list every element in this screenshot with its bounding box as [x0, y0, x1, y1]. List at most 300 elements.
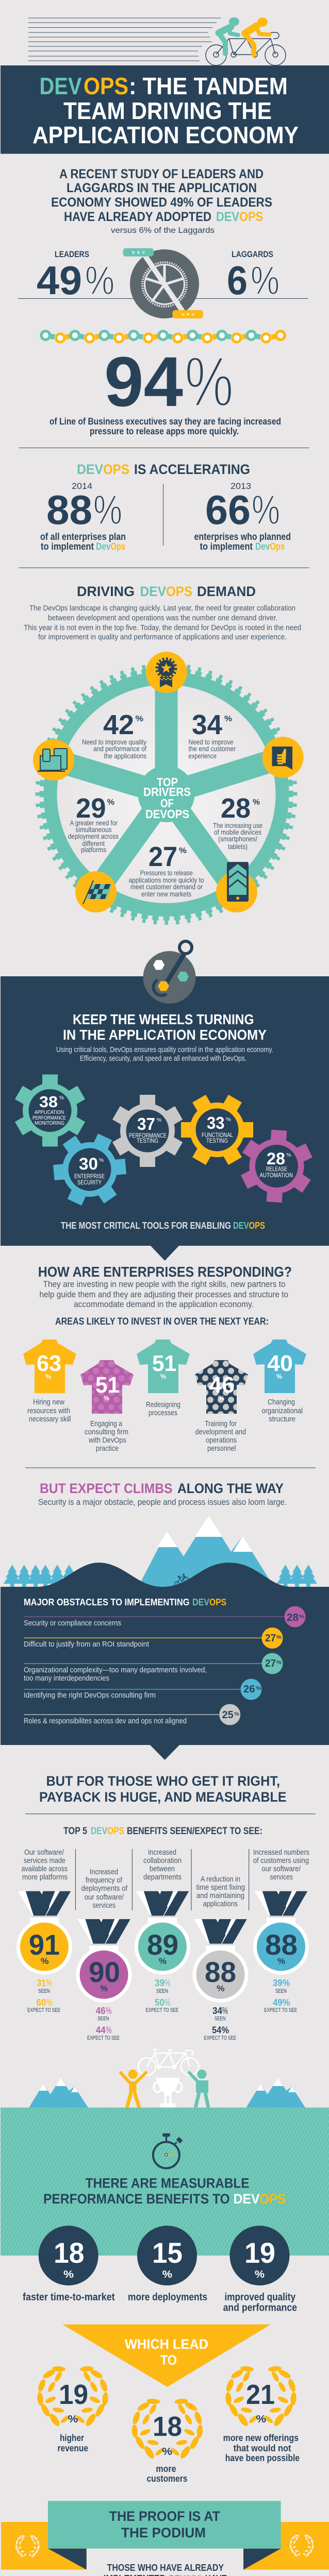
- medal: more platforms 91%: services made: [24, 1856, 65, 1865]
- driver 29%: simultaneous: [75, 825, 111, 834]
- driver 27%: meet customer demand or: [130, 883, 203, 891]
- jersey: hiring 63%: resources with: [27, 1406, 70, 1415]
- medal: deployment frequency 90%: Increased: [90, 1868, 118, 1876]
- gear: enterprise security 30%: %: [99, 1158, 104, 1163]
- driver 28%: 28: [221, 793, 251, 824]
- driver 29%: platforms: [81, 845, 106, 854]
- stat: 2014 88%: 2014: [72, 481, 92, 491]
- medal: collaboration 89%: Increased: [148, 1848, 176, 1857]
- medal: more platforms 91%: available across: [22, 1865, 68, 1873]
- obstacle: roles 25%: Roles & responsibilites across dev and ops not aligned: [24, 1717, 187, 1725]
- heading: DevOps is accelerating: IS ACCELERATING: [134, 462, 250, 477]
- gear: performance testing 37%: [116, 1095, 179, 1167]
- gear: performance testing 37%: TESTING: [137, 1138, 158, 1144]
- stat: 19% improved quality: %: [255, 2269, 265, 2280]
- stat: 2013 66%: to implement: [200, 541, 253, 552]
- obstacle: complexity 27%: %: [276, 1660, 282, 1666]
- gear: functional testing 33%: TESTING: [206, 1138, 228, 1144]
- obstacle: complexity 27%: [24, 1653, 283, 1683]
- jersey: hiring 63%: [23, 1340, 76, 1423]
- jersey: organizational structure 40%: %: [276, 1372, 282, 1380]
- chart caption: THE MOST CRITICAL TOOLS FOR ENABLING: [61, 1221, 231, 1231]
- stat: 19% improved quality: and performance: [223, 2302, 297, 2314]
- subheading: top 5 benefits: DEV: [91, 1826, 107, 1837]
- stat: 15% more deployments: [128, 2226, 207, 2303]
- medal: collaboration 89%: EXPECT TO SEE: [145, 2007, 178, 2013]
- medal: more customers 88%: EXPECT TO SEE: [264, 2007, 297, 2013]
- heading: PERFORMANCE BENEFITS TO: [43, 2191, 230, 2207]
- obstacle: complexity 27%: too many interdependencies: [24, 1674, 109, 1683]
- stat: laggards 6%: %: [251, 258, 279, 303]
- gear: release automation 28%: AUTOMATION: [260, 1173, 293, 1179]
- driver 28%: tablets): [228, 842, 248, 851]
- wreath: 21% more new offerings: %: [256, 2414, 266, 2425]
- gear: application performance monitoring 38%: [19, 1075, 81, 1147]
- stat: 18% faster time-to-market: %: [63, 2269, 74, 2280]
- stat: 19% improved quality: 19: [244, 2236, 275, 2269]
- stat: 94%: 94: [104, 343, 183, 421]
- stat: 2013 66%: %: [252, 487, 280, 533]
- heading: but expect climbs: ALONG THE WAY: [177, 1481, 284, 1496]
- medal: reduced maintenance 88%: 34: [212, 2006, 222, 2016]
- medal: deployment frequency 90%: deployments of: [81, 1884, 128, 1893]
- stat: 15% more deployments: 15: [152, 2236, 183, 2269]
- title banner: TEAM DRIVING THE: [63, 97, 272, 124]
- medal: reduced maintenance 88%: and maintaining: [196, 1891, 244, 1900]
- title banner: APPLICATION ECONOMY: [32, 122, 299, 148]
- gear: performance testing 37%: PERFORMANCE: [129, 1133, 167, 1139]
- stat: 94%: %: [185, 343, 234, 421]
- medal: deployment frequency 90%: SEEN: [97, 2016, 109, 2022]
- jersey: redesigning processes 51%: %: [160, 1372, 166, 1380]
- intro statement: ECONOMY SHOWED 49% OF LEADERS: [51, 195, 272, 210]
- driver 42%: and performance of: [93, 744, 146, 753]
- driver 34%: [189, 709, 236, 760]
- medal: reduced maintenance 88%: %: [222, 2006, 228, 2016]
- teal person: [189, 2070, 208, 2108]
- driver 27%: %: [179, 846, 187, 855]
- medal: collaboration 89%: 50: [155, 1997, 164, 2008]
- medal: more customers 88%: 88: [265, 1928, 298, 1961]
- wreath: 18% more customers: more: [156, 2464, 176, 2474]
- heading: OPS: [209, 1597, 226, 1607]
- stat: 2014 88%: [40, 481, 126, 552]
- subheading: top 5 benefits: BENEFITS SEEN/EXPECT TO SEE:: [127, 1826, 262, 1837]
- stat: 94%: of Line of Business executives say they are facing increased: [50, 416, 281, 427]
- text block: enterprises response: [39, 1279, 288, 1309]
- gear: release automation 28%: %: [287, 1153, 291, 1158]
- gear: application performance monitoring 38%: APPLICATION: [35, 1109, 64, 1115]
- obstacle: roles 25%: %: [234, 1711, 239, 1717]
- jersey: consulting firm 51%: 51: [95, 1372, 120, 1398]
- medal: reduced maintenance 88%: time spent fixing: [196, 1883, 245, 1892]
- icon: chainring with DEV and OPS crank: [123, 248, 203, 318]
- obstacle: consulting firm 26%: Identifying the right DevOps consulting firm: [24, 1691, 156, 1700]
- jersey: redesigning processes 51%: Redesigning: [146, 1400, 180, 1409]
- medal: collaboration 89%: collaboration: [143, 1856, 182, 1865]
- title banner: [1, 65, 329, 154]
- driver 42%: the applications: [104, 752, 146, 760]
- medal: reduced maintenance 88%: 54%: [212, 2025, 229, 2036]
- wreath: 21% more new offerings: that would not: [234, 2443, 291, 2453]
- wreath: 21% more new offerings: have been possible: [225, 2453, 300, 2463]
- medal: deployment frequency 90%: 44: [96, 2025, 106, 2036]
- stat: 2014 88%: 88: [46, 487, 92, 533]
- stat: 2014 88%: Dev: [96, 541, 111, 552]
- medal: more customers 88%: services: [270, 1873, 293, 1882]
- driver 28%: (smartphones/: [218, 835, 257, 843]
- medal: reduced maintenance 88%: [193, 1875, 249, 2041]
- intro statement: versus 6% of the Laggards: [111, 226, 215, 235]
- obstacle: consulting firm 26%: %: [256, 1686, 261, 1691]
- heading: DevOps is accelerating: DEV: [77, 462, 103, 477]
- driver 34%: 34: [192, 709, 222, 740]
- medal: reduced maintenance 88%: 88: [205, 1956, 236, 1988]
- heading: payback: PAYBACK IS HUGE, AND MEASURABLE: [39, 1789, 287, 1805]
- wreath: 19% higher revenue: [37, 2366, 109, 2453]
- gear: enterprise security 30%: 30: [79, 1155, 98, 1173]
- driver 34%: Need to improve: [189, 738, 234, 746]
- mountains left: [29, 2078, 88, 2108]
- stat: laggards 6%: [227, 249, 279, 303]
- white trophy: [154, 2078, 182, 2108]
- driver 29%: A greater need for: [70, 819, 118, 827]
- stat: leaders 49%: [37, 249, 114, 303]
- driver 27%: applications more quickly to: [129, 876, 204, 884]
- medal: more customers 88%: our software/: [262, 1865, 301, 1873]
- gear: functional testing 33%: %: [226, 1117, 231, 1123]
- stat: 2013 66%: 66: [205, 487, 251, 533]
- jersey: hiring 63%: 63: [37, 1351, 61, 1376]
- stat: 18% faster time-to-market: faster time-to-market: [23, 2292, 115, 2303]
- obstacle: ROI 27%: %: [276, 1635, 282, 1640]
- text block: demand intro: [24, 604, 301, 641]
- gear body: [37, 665, 295, 923]
- panel: performance benefits: [1, 2108, 329, 2256]
- medal: more platforms 91%: 91: [29, 1928, 60, 1961]
- jersey: redesigning processes 51%: 51: [152, 1351, 176, 1376]
- jersey: organizational structure 40%: structure: [269, 1415, 295, 1423]
- gear: release automation 28%: RELEASE: [266, 1166, 287, 1173]
- title banner: OPS: [84, 73, 128, 99]
- medal: reduced maintenance 88%: applications: [203, 1900, 238, 1908]
- medal: reduced maintenance 88%: %: [217, 1984, 225, 1993]
- driver 34%: %: [224, 715, 232, 723]
- medal: more platforms 91%: %: [46, 1997, 53, 2008]
- medal: more platforms 91%: Our software/: [24, 1848, 64, 1857]
- jersey: consulting firm 51%: consulting firm: [85, 1428, 128, 1436]
- gear: enterprise security 30%: [46, 1124, 134, 1215]
- stat: 2013 66%: enterprises who planned: [194, 532, 291, 543]
- text block: those who have implemented: [98, 2563, 232, 2576]
- medal: deployment frequency 90%: 90: [89, 1956, 120, 1988]
- medal: more platforms 91%: EXPECT TO SEE: [27, 2007, 60, 2013]
- banner: the proof is at the podium: [1, 2501, 329, 2570]
- heading: driving DevOps demand: DEMAND: [197, 584, 256, 599]
- medal: collaboration 89%: between: [150, 1865, 175, 1873]
- intro statement: HAVE ALREADY ADOPTED: [64, 210, 211, 224]
- chart caption: OPS: [249, 1221, 265, 1231]
- gear: enterprise security 30%: ENTERPRISE: [74, 1174, 105, 1180]
- heading: [43, 2176, 286, 2207]
- subheading: areas likely to invest: AREAS LIKELY TO INVEST IN OVER THE NEXT YEAR:: [55, 1316, 269, 1327]
- jersey: hiring 63%: necessary skill: [29, 1415, 71, 1423]
- driver 42%: Need to improve quality: [82, 738, 146, 746]
- driver 29%: %: [107, 798, 114, 807]
- subheading: top 5 benefits: TOP 5: [63, 1826, 87, 1837]
- banner: the proof is at the podium: THE PROOF IS AT: [109, 2509, 220, 2524]
- title banner: DEV: [39, 73, 82, 99]
- obstacle: security 28%: %: [299, 1614, 304, 1620]
- driver 29%: deployment across: [68, 832, 119, 840]
- chart caption: DEV: [233, 1221, 249, 1231]
- stat: 18% faster time-to-market: 18: [54, 2236, 85, 2269]
- text block: Efficiency, security, and speed are all enhanced with DevOps.: [80, 1054, 246, 1063]
- heading: how are enterprises responding: HOW ARE ENTERPRISES RESPONDING?: [38, 1264, 292, 1280]
- medal: reduced maintenance 88%: EXPECT TO SEE: [204, 2035, 236, 2041]
- medal: deployment frequency 90%: frequency of: [86, 1876, 123, 1885]
- chart: big gear of top drivers: [33, 652, 304, 923]
- text block: demand intro: between development and operations was the number one demand driver.: [48, 614, 277, 622]
- obstacle: roles 25%: 25: [222, 1709, 234, 1721]
- gear hub label: OF: [160, 796, 174, 810]
- heading: but expect climbs: BUT EXPECT CLIMBS: [40, 1481, 172, 1496]
- jersey: organizational structure 40%: [253, 1340, 306, 1423]
- gear hub label: DEVOPS: [145, 807, 189, 821]
- medal: collaboration 89%: [135, 1848, 190, 2013]
- jersey: hiring 63%: Hiring new: [33, 1398, 64, 1406]
- gear: performance testing 37%: 37: [137, 1114, 155, 1133]
- gear: functional testing 33%: [172, 1083, 262, 1177]
- medal: more platforms 91%: more platforms: [22, 1873, 68, 1882]
- callout: which lead to: TO: [160, 2352, 177, 2368]
- heading: driving DevOps demand: [77, 584, 256, 599]
- driver 28%: The increasing use: [213, 821, 262, 829]
- callout: which lead to: WHICH LEAD: [125, 2336, 208, 2352]
- wreath: 19% higher revenue: higher: [60, 2433, 84, 2443]
- text block: demand intro: for improvement in quality and performance of applications and user experience.: [38, 633, 287, 641]
- driver icon: smartphone: [216, 862, 257, 912]
- intro statement: OPS: [239, 210, 263, 224]
- driver icon: thumbs up: [262, 737, 304, 778]
- heading: driving DevOps demand: DEV: [140, 584, 166, 599]
- heading: IN THE APPLICATION ECONOMY: [63, 1027, 267, 1043]
- medal: more platforms 91%: 31: [37, 1978, 46, 1988]
- medal: more customers 88%: Increased numbers: [253, 1848, 309, 1857]
- text block: [56, 1045, 273, 1063]
- medal: more customers 88%: of customers using: [253, 1856, 309, 1865]
- medal: deployment frequency 90%: our software/: [85, 1893, 124, 1902]
- medal: collaboration 89%: 89: [147, 1928, 178, 1961]
- heading: THERE ARE MEASURABLE: [86, 2176, 250, 2191]
- wreath: 21% more new offerings: 21: [246, 2379, 275, 2410]
- medal: deployment frequency 90%: %: [100, 1984, 108, 1993]
- callout: which lead to: [62, 2325, 271, 2387]
- gear: application performance monitoring 38%: PERFORMANCE: [32, 1115, 66, 1121]
- medal: more platforms 91%: %: [46, 1978, 52, 1988]
- obstacle: ROI 27%: 27: [265, 1633, 276, 1644]
- driver 28%: [213, 793, 262, 851]
- medal: more platforms 91%: SEEN: [38, 1988, 50, 1994]
- driver 34%: experience: [189, 752, 217, 760]
- jersey: consulting firm 51%: Engaging a: [90, 1419, 123, 1428]
- stat: 2013 66%: 2013: [231, 481, 251, 491]
- medal: deployment frequency 90%: services: [93, 1901, 116, 1910]
- driver 28%: %: [253, 798, 260, 807]
- icon: stopwatch: [153, 2133, 183, 2168]
- heading: but expect climbs: Security is a major obstacle, people and process issues also loom large.: [38, 1497, 287, 1507]
- mountains right: [246, 2078, 305, 2108]
- obstacle: consulting firm 26%: [24, 1679, 262, 1700]
- medal: more platforms 91%: %: [41, 1956, 48, 1966]
- white bicycle: [138, 2049, 199, 2075]
- wreath: 19% higher revenue: %: [68, 2414, 78, 2425]
- heading: DevOps is accelerating: OPS: [103, 462, 129, 477]
- text block: enterprises response: help guide them and they are adjusting their processes and structure to: [39, 1290, 288, 1299]
- divider line with chainring: [18, 298, 308, 299]
- wreath: 18% more customers: customers: [146, 2473, 188, 2484]
- obstacle: security 28%: [24, 1606, 305, 1628]
- gear: functional testing 33%: FUNCTIONAL: [202, 1132, 233, 1139]
- driver icon: devices: [33, 739, 74, 781]
- driver 29%: [68, 793, 119, 854]
- icon: chainring with DEV and OPS crank: DEV: [132, 250, 145, 255]
- medal: deployment frequency 90%: %: [106, 2006, 111, 2016]
- obstacle: complexity 27%: Organizational complexity—too many departments involved,: [24, 1666, 207, 1674]
- driver 27%: Pressures to release: [140, 869, 193, 877]
- gear: application performance monitoring 38%: 38: [39, 1093, 58, 1111]
- driver 29%: 29: [76, 793, 106, 824]
- jersey: organizational structure 40%: Changing: [268, 1398, 295, 1406]
- jersey: hiring 63%: %: [45, 1372, 51, 1380]
- medal: more platforms 91%: 60: [36, 1997, 46, 2008]
- wreath: 18% more customers: %: [162, 2446, 172, 2458]
- medal: more platforms 91%: [17, 1848, 72, 2013]
- stat: 94%: pressure to release apps more quickly.: [90, 426, 239, 436]
- medal: deployment frequency 90%: 46: [96, 2006, 106, 2016]
- jersey: consulting firm 51%: practice: [96, 1444, 119, 1453]
- gear: application performance monitoring 38%: MONITORING: [35, 1120, 64, 1126]
- medal: deployment frequency 90%: [76, 1868, 132, 2041]
- medal: reduced maintenance 88%: A reduction in: [201, 1875, 240, 1884]
- stat: 18% faster time-to-market: [23, 2226, 115, 2303]
- banner: the proof is at the podium: THE PODIUM: [121, 2525, 206, 2540]
- stat: 2014 88%: %: [93, 487, 122, 533]
- wreath: 18% more customers: 18: [153, 2411, 182, 2442]
- jersey: consulting firm 51%: [80, 1360, 134, 1453]
- jersey: redesigning processes 51%: [137, 1340, 190, 1417]
- gear: enterprise security 30%: SECURITY: [77, 1180, 102, 1186]
- gear: application performance monitoring 38%: %: [59, 1095, 64, 1101]
- medal: deployment frequency 90%: %: [106, 2025, 111, 2036]
- icon: bicycle chain: [40, 330, 286, 344]
- wreath: 19% higher revenue: revenue: [58, 2443, 88, 2453]
- medal: reduced maintenance 88%: SEEN: [215, 2016, 226, 2022]
- driver 28%: of mobile devices: [214, 828, 261, 836]
- stat: leaders 49%: LEADERS: [55, 249, 89, 259]
- intro statement: [51, 167, 272, 235]
- stat: laggards 6%: 6: [227, 258, 248, 303]
- panel: major obstacles: [1, 1563, 329, 1760]
- heading: driving DevOps demand: OPS: [166, 584, 192, 599]
- text block: those who have implemented: THOSE WHO HAVE ALREADY: [107, 2563, 224, 2573]
- obstacle: complexity 27%: 27: [265, 1658, 276, 1669]
- medal: collaboration 89%: departments: [143, 1873, 182, 1882]
- illustration: mountains and trees: [4, 1516, 317, 1587]
- medal: collaboration 89%: %: [164, 1978, 170, 1988]
- jersey: training 46%: development and: [195, 1428, 246, 1436]
- wreath: 19% higher revenue: 19: [59, 2379, 88, 2410]
- icon: wrench and nuts: [143, 941, 196, 1004]
- medal: collaboration 89%: %: [164, 1997, 170, 2008]
- gear: release automation 28%: [243, 1128, 310, 1205]
- stat: 2014 88%: of all enterprises plan: [40, 532, 126, 543]
- obstacle: ROI 27%: [24, 1628, 283, 1649]
- gear hub label: TOP: [157, 775, 178, 789]
- medal: more customers 88%: 49%: [273, 1997, 290, 2008]
- medal: collaboration 89%: %: [159, 1956, 167, 1966]
- heading: OPS: [260, 2191, 286, 2207]
- driver 27%: [129, 841, 204, 898]
- jersey: training 46%: personnel: [207, 1444, 236, 1453]
- text block: Using critical tools, DevOps ensures quality control in the application economy.: [56, 1045, 273, 1054]
- jersey: training 46%: %: [218, 1394, 224, 1402]
- jersey: redesigning processes 51%: processes: [149, 1409, 177, 1417]
- heading: DEV: [234, 2191, 260, 2207]
- obstacle: consulting firm 26%: 26: [243, 1684, 255, 1695]
- medal: more customers 88%: [253, 1848, 309, 2013]
- title banner: : THE TANDEM: [129, 73, 288, 99]
- panel: keep the wheels turning: [1, 941, 329, 1261]
- heading: DEV: [192, 1597, 209, 1607]
- wreath: 18% more customers: [131, 2398, 203, 2484]
- intro statement: A RECENT STUDY OF LEADERS AND: [59, 167, 264, 181]
- obstacle: ROI 27%: Difficult to justify from an ROI standpoint: [24, 1640, 149, 1649]
- heading: driving DevOps demand: DRIVING: [77, 584, 135, 599]
- medal: more customers 88%: 39%: [273, 1978, 290, 1988]
- jersey: organizational structure 40%: organizational: [262, 1406, 303, 1415]
- jersey: training 46%: Training for: [205, 1419, 237, 1428]
- stat: 19% improved quality: [223, 2226, 297, 2314]
- driver 27%: enter new markets: [141, 890, 191, 898]
- driver 29%: different: [83, 839, 105, 848]
- medal: more customers 88%: %: [277, 1956, 285, 1966]
- driver 34%: the end customer: [189, 744, 236, 753]
- text block: enterprises response: They are investing in new people with the right skills, new partners to: [43, 1279, 286, 1289]
- jersey: consulting firm 51%: %: [104, 1394, 109, 1402]
- medal: deployment frequency 90%: EXPECT TO SEE: [87, 2035, 120, 2041]
- text block: demand intro: The DevOps landscape is changing quickly. Last year, the need for greater collaboration: [29, 604, 295, 613]
- driver 42%: 42: [103, 709, 134, 740]
- driver icon: checkered flag: [75, 871, 117, 912]
- jersey: training 46%: 46: [209, 1372, 235, 1398]
- icon: small tandem on hill: [174, 1574, 189, 1586]
- jersey: consulting firm 51%: with DevOps: [88, 1436, 126, 1445]
- yellow person: [121, 2070, 146, 2108]
- heading: but expect climbs: [38, 1481, 287, 1507]
- stat: 2013 66%: [194, 481, 291, 552]
- illustration: podium celebration: [29, 2049, 305, 2108]
- medal: collaboration 89%: SEEN: [156, 1988, 168, 1994]
- heading: DevOps is accelerating: [77, 462, 250, 477]
- heading: payback: BUT FOR THOSE WHO GET IT RIGHT,: [46, 1773, 280, 1789]
- heading: MAJOR OBSTACLES TO IMPLEMENTING: [24, 1597, 190, 1607]
- stat: laggards 6%: LAGGARDS: [232, 249, 273, 259]
- gear hub label: [143, 775, 191, 821]
- gear: performance testing 37%: %: [157, 1117, 161, 1123]
- gear: functional testing 33%: 33: [207, 1113, 225, 1132]
- intro statement: DEV: [216, 210, 239, 224]
